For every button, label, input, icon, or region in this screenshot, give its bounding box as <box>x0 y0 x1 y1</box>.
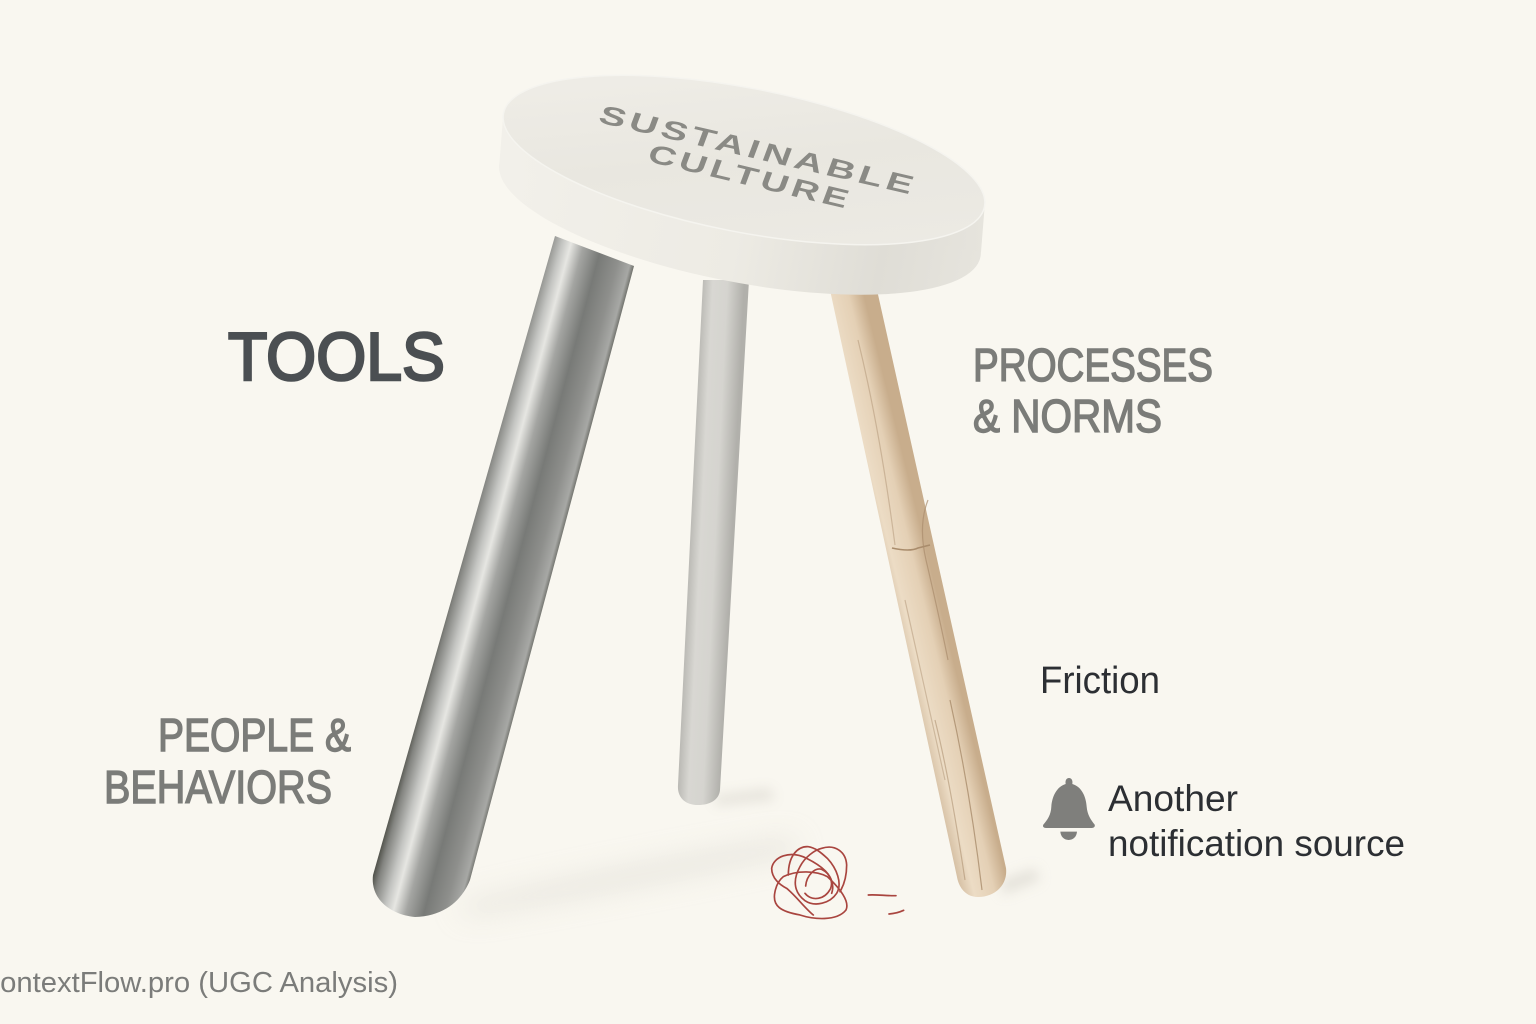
wood grain and crack <box>858 340 982 890</box>
seat top face <box>490 43 998 277</box>
label: people and behaviors <box>104 709 351 813</box>
label: processes and norms: PROCESSES <box>973 339 1213 391</box>
label: people and behaviors: BEHAVIORS <box>104 761 332 813</box>
label: another notification source <box>1108 778 1405 864</box>
label: processes and norms <box>973 339 1213 442</box>
label: tools: TOOLS <box>228 319 445 395</box>
label: another notification source: notification source <box>1108 823 1405 864</box>
seat label: SUSTAINABLE <box>595 99 922 201</box>
icon: tangled red thread <box>772 847 904 919</box>
stool seat <box>486 43 998 327</box>
seat label: CULTURE <box>644 138 857 215</box>
label: friction: Friction <box>1040 660 1160 702</box>
wooden leg (processes and norms) <box>830 290 1006 897</box>
seat side <box>486 93 994 327</box>
label: people and behaviors: PEOPLE & <box>158 709 351 761</box>
label: processes and norms: & NORMS <box>973 390 1162 442</box>
metal leg (people & behaviors) <box>373 236 634 917</box>
icon: notification bell <box>1043 778 1095 840</box>
floor shadows <box>455 788 1040 915</box>
middle painted leg (tools) <box>678 280 749 805</box>
seat label <box>595 99 922 215</box>
label: another notification source: Another <box>1108 778 1238 819</box>
